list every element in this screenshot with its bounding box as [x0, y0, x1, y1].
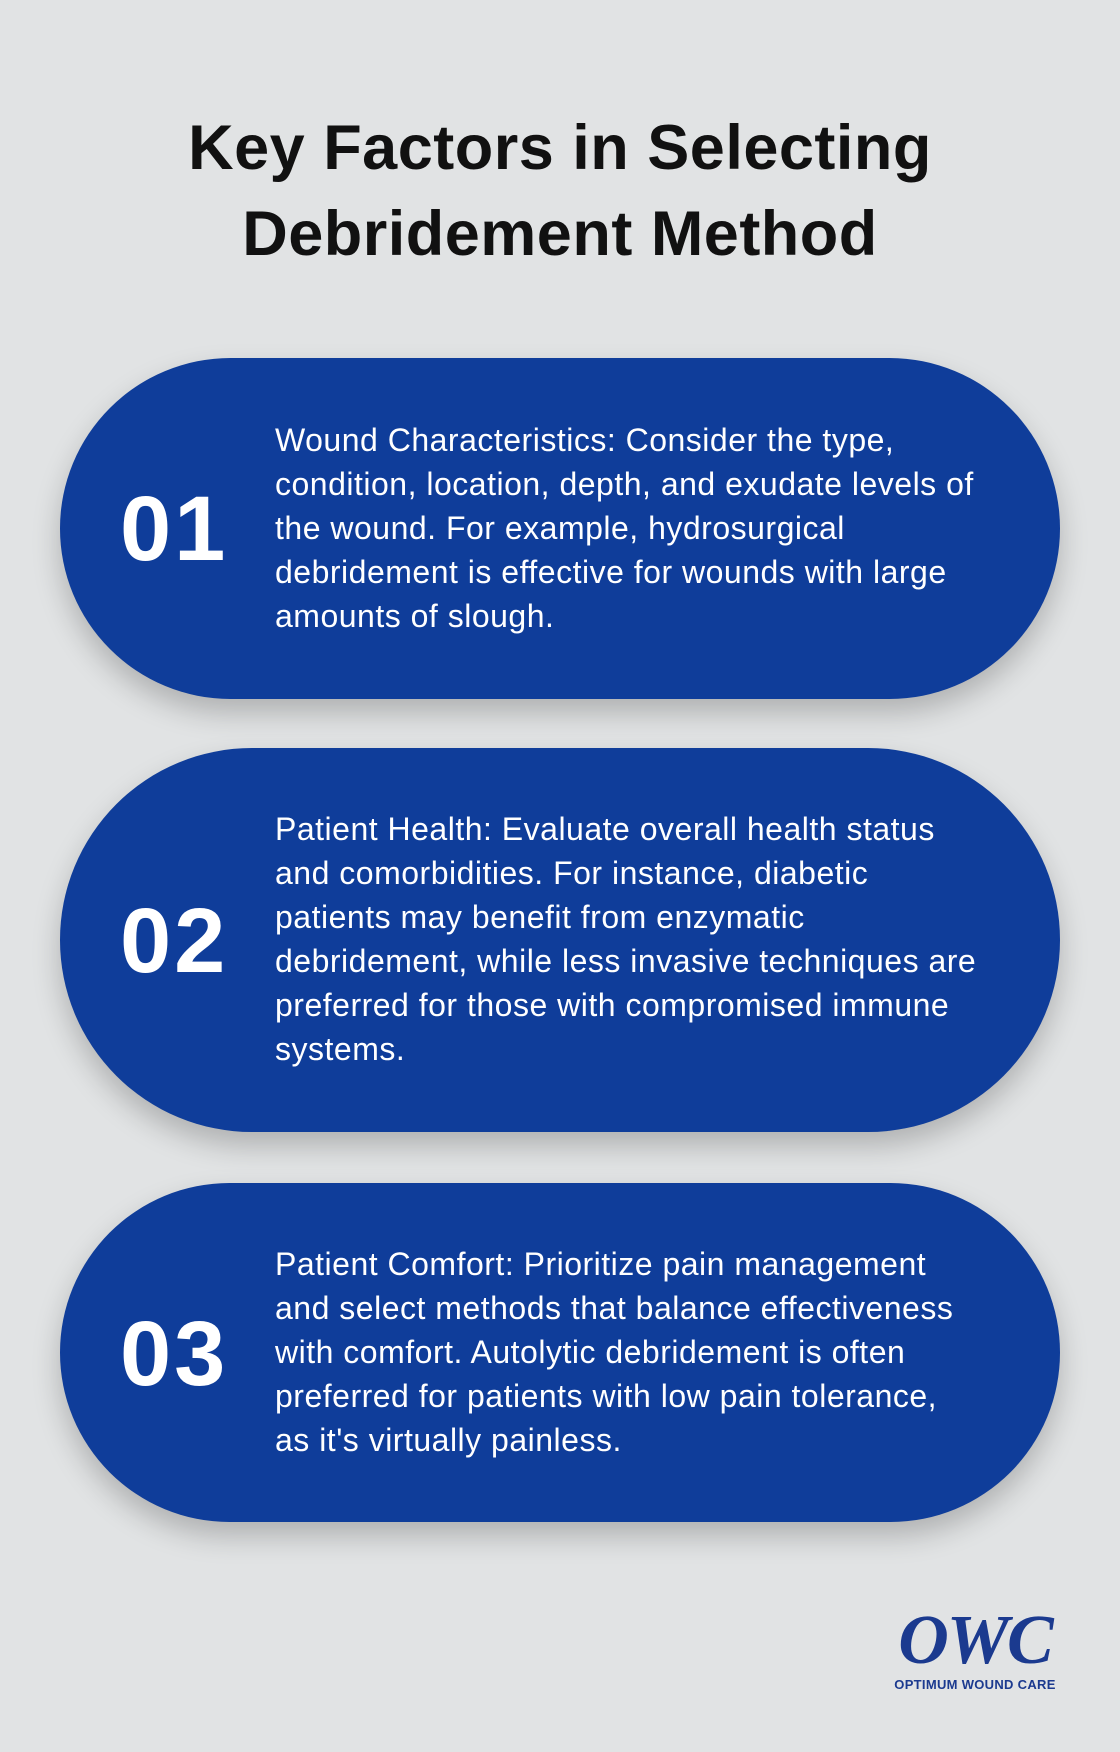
text 01: condition, location, depth, and exudate levels of — [275, 466, 974, 502]
text 02: systems. — [275, 1031, 405, 1067]
text 03: preferred for patients with low pain tolerance, — [275, 1378, 937, 1414]
text 01 — [275, 422, 974, 634]
text 03 — [275, 1246, 953, 1458]
text 02 — [275, 811, 976, 1067]
text 01: the wound. For example, hydrosurgical — [275, 510, 845, 546]
logo: OPTIMUM WOUND CARE — [894, 1677, 1056, 1692]
text 03: and select methods that balance effectiveness — [275, 1290, 953, 1326]
title — [188, 113, 932, 269]
text 02: and comorbidities. For instance, diabetic — [275, 855, 868, 891]
text 01: Wound Characteristics: Consider the type, — [275, 422, 894, 458]
title: Key Factors in Selecting — [188, 113, 932, 183]
number 03: 03 — [120, 1303, 228, 1405]
logo: OWC — [898, 1602, 1052, 1679]
panel: 03 patient comfort — [60, 1183, 1060, 1522]
text 02: Patient Health: Evaluate overall health status — [275, 811, 935, 847]
text 02: debridement, while less invasive techniques are — [275, 943, 976, 979]
panel: 01 wound characteristics — [60, 358, 1060, 699]
text 03: with comfort. Autolytic debridement is often — [275, 1334, 905, 1370]
text 01: debridement is effective for wounds with large — [275, 554, 947, 590]
panel: 02 patient health — [60, 748, 1060, 1132]
text 03: as it's virtually painless. — [275, 1422, 622, 1458]
text 01: amounts of slough. — [275, 598, 554, 634]
text 02: patients may benefit from enzymatic — [275, 899, 805, 935]
title: Debridement Method — [242, 199, 878, 269]
text 03: Patient Comfort: Prioritize pain management — [275, 1246, 926, 1282]
number 02: 02 — [120, 890, 228, 992]
number 01: 01 — [120, 478, 228, 580]
text 02: preferred for those with compromised immune — [275, 987, 949, 1023]
